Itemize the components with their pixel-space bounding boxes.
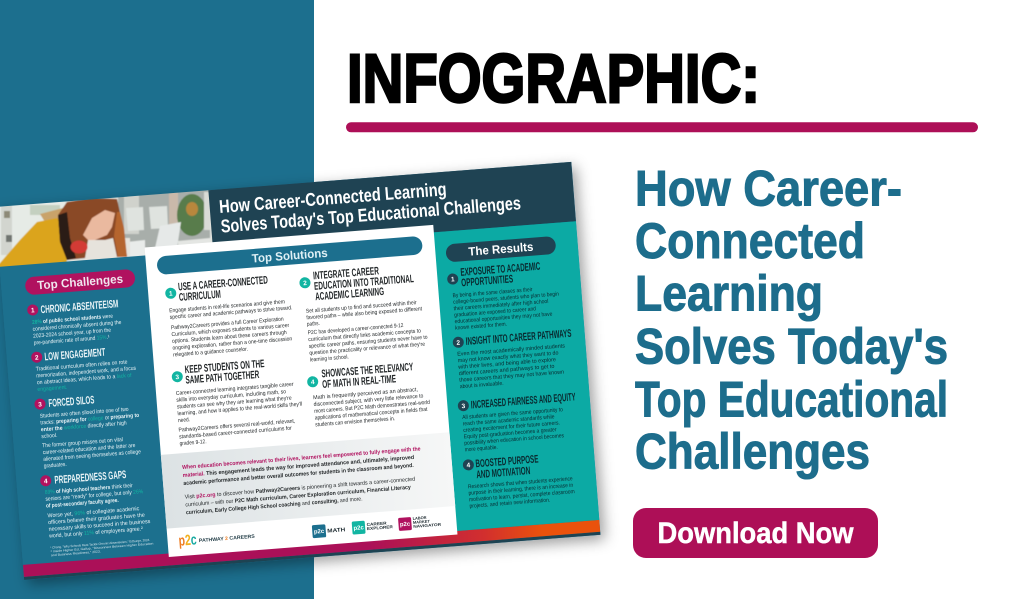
result 1: graduation are exposed to career and	[454, 306, 536, 319]
title: how career-connected learning: Solves Today's	[635, 318, 948, 374]
logo: p2c career explorer: EXPLORER	[367, 524, 393, 531]
solution 1: Pathway2Careers provides a full Career Exploration	[171, 317, 284, 331]
challenge 4: preparedness gaps: necessary skills to succeed in the business	[48, 519, 151, 533]
solution 4: disconnected subject, with very little relevance to	[313, 393, 424, 408]
result 1: By being in the same classes as their	[452, 287, 533, 299]
logo: p2c math	[312, 523, 346, 538]
result 1: known existed for them.	[455, 322, 508, 332]
challenge 3: forced silos: graduates.	[44, 462, 67, 470]
solution 4: Math is frequently perceived as an abstract,	[313, 387, 419, 401]
solution 1: 1	[169, 290, 173, 298]
heading pill: the results	[445, 236, 556, 262]
document title: Solves Today's Top Educational Challenges	[220, 192, 522, 237]
challenge 1: chronic absenteeism: 28% of public school students were	[32, 314, 113, 326]
challenge 3: forced silos: enter the workforce directly after high	[41, 421, 127, 433]
result 3: reach the same academic standards while	[463, 414, 555, 427]
result 1: OPPORTUNITIES	[461, 273, 514, 289]
heading pill: top challenges: Top Challenges	[37, 272, 124, 292]
solution 3: SAME PATH TOGETHER	[185, 369, 260, 387]
challenge 2: low engagement: memorization, independent work, and a focus	[36, 366, 136, 379]
challenge 2: low engagement: engagement.	[37, 385, 68, 393]
logo: p2c career explorer: p2c	[353, 525, 365, 532]
challenge 3: forced silos: tracks: preparing for college or preparing to	[40, 413, 140, 427]
solution 1: USE A CAREER-CONNECTED	[178, 274, 268, 293]
challenge 1: chronic absenteeism	[27, 298, 123, 347]
result 3: more equitable.	[465, 445, 498, 453]
heading pill: the results: The Results	[468, 240, 534, 259]
result 4	[462, 451, 576, 510]
challenge 1: chronic absenteeism: 2023-2024 school year, up from the	[33, 328, 111, 340]
solution 2: INTEGRATE CAREER	[313, 265, 379, 282]
title: how career-connected learning: Connected	[635, 213, 865, 269]
challenge 2: low engagement	[31, 344, 138, 393]
heading pill: top solutions: Top Solutions	[251, 246, 328, 266]
solution 1: relegated to a guidance counselor.	[173, 347, 249, 358]
result 2: with their lives, and being able to explore	[457, 357, 556, 371]
result 1: college-bound peers, students who plan to begin	[453, 292, 559, 306]
challenge 4: preparedness gaps: world, but only 11% of employers agree.²	[48, 526, 143, 540]
result 2: Even the most academically minded students	[457, 343, 565, 358]
solution 1: Engage students in real-life scenarios and give them	[169, 299, 285, 314]
challenge 2: low engagement: Traditional curriculum often relies on rote	[36, 360, 128, 373]
solution 1: specific career and academic pathways to strive toward.	[170, 305, 293, 321]
challenge 3: forced silos: school.	[41, 433, 58, 440]
solution 4: SHOWCASE THE RELEVANCY	[321, 361, 414, 380]
solution 3: 3	[175, 374, 180, 381]
challenge 4: preparedness gaps: of post-secondary faculty agree.	[46, 498, 119, 510]
challenge 4: preparedness gaps: 89% of high school teachers think their	[45, 483, 133, 496]
result 2: 2	[456, 340, 461, 347]
solution 3: KEEP STUDENTS ON THE	[184, 358, 265, 376]
result 3: Equity post-graduation becomes a greater	[464, 427, 557, 440]
solution 2: ACADEMIC LEARNING	[315, 286, 384, 303]
heading pill: top challenges	[25, 269, 136, 295]
challenge 3: forced silos: The former group misses out on vital	[42, 437, 123, 449]
results content	[445, 235, 585, 510]
result 1: educational opportunities they may not have	[454, 312, 553, 325]
logo: p2c labor market navigator: LABOR	[412, 515, 427, 521]
callout: grey text box: material. This engagement leads the way for improved attendance and, ultimately, improved	[183, 455, 415, 479]
challenge 1: chronic absenteeism: considered chronically absent during the	[32, 320, 122, 333]
challenge 3: forced silos: Students are often siloed into one of two	[40, 407, 129, 420]
logo: p2c math: MATH	[327, 527, 346, 535]
result 2: about is invaluable.	[460, 381, 504, 390]
challenge 1: chronic absenteeism: 1	[31, 307, 35, 315]
bottom colour band	[23, 520, 600, 580]
challenge 3: forced silos	[34, 391, 143, 470]
panel: results background	[433, 221, 599, 531]
button: download now	[633, 508, 878, 558]
logo: p2c labor market navigator: p2c	[400, 522, 411, 528]
result 4: purpose in their learning, there is an increase in	[468, 483, 573, 497]
document title	[218, 173, 522, 237]
logo: pathway 2 careers	[178, 527, 256, 550]
challenge 2: low engagement: LOW ENGAGEMENT	[44, 347, 106, 363]
solution 4: most careers. But P2C Math demonstrates real-world	[314, 400, 430, 415]
divider rule	[346, 122, 978, 132]
solution 2	[299, 262, 429, 364]
challenge 4: preparedness gaps: PREPAREDNESS GAPS	[54, 469, 127, 487]
result 3	[457, 391, 580, 454]
title: how career-connected learning: Learning	[635, 266, 823, 322]
solution 3: learning, and how it applies to the real-world skills they'll	[177, 402, 302, 417]
challenge 3: forced silos: alienated from seeing themselves as college	[43, 449, 141, 463]
footnotes: and Business Readiness," 2023.	[51, 549, 101, 557]
logo: p2c labor market navigator	[398, 514, 442, 531]
panel: top solutions	[145, 225, 457, 557]
document title: How Career-Connected Learning	[218, 178, 447, 217]
result 3: creating excitement for their future careers.	[463, 420, 561, 434]
solution 4: applications of mathematical concepts in fields that	[315, 407, 428, 422]
logo: p2c labor market navigator: NAVIGATOR	[413, 522, 442, 529]
title: how career-connected learning: Top Educational	[635, 372, 948, 428]
result 4: BOOSTED PURPOSE	[475, 453, 539, 470]
result 2: INSIGHT INTO CAREER PATHWAYS	[465, 328, 572, 348]
button: download now: Download Now	[658, 517, 854, 550]
result 1: 1	[451, 276, 455, 284]
callout: grey text box: academic performance and better overall outcomes for students in the classroom and beyond.	[183, 463, 414, 487]
heading pill: top solutions	[156, 236, 423, 275]
logo: p2c labor market navigator: MARKET	[413, 519, 431, 525]
footnotes	[50, 538, 154, 557]
solution 2: question the practicality or relevance of what they're	[309, 342, 425, 357]
title: how career-connected learning: How Career-	[635, 160, 902, 216]
callout: grey text box	[182, 446, 424, 516]
blue left background	[0, 0, 314, 599]
challenge 3: forced silos: FORCED SILOS	[48, 394, 95, 410]
solution 2: favored paths – while also being exposed to different	[306, 306, 423, 321]
result 4: motivation to learn, persist, complete classroom	[469, 489, 575, 503]
challenge 4: preparedness gaps: 4	[44, 478, 48, 485]
challenge 4: preparedness gaps: seniors are “ready” for college, but only 26%	[45, 489, 143, 503]
callout: grey text box: curriculum – with our P2C Math curriculum, Career Exploration curriculum, Financial Literacy	[185, 485, 412, 508]
solution 2: curriculum that directly links academic concepts to	[308, 328, 421, 343]
challenge 1: chronic absenteeism: pre-pandemic rate of around 15%.¹	[34, 335, 110, 347]
solutions content	[156, 236, 444, 550]
challenge 3: forced silos: career-related education and the latter are	[43, 443, 136, 456]
result 2: those careers that they may not have known	[459, 370, 564, 384]
infographic document preview	[0, 135, 600, 581]
callout: grey text box: curriculum, Early College High School coaching and consulting, and more.	[186, 496, 363, 516]
result 1: EXPOSURE TO ACADEMIC	[460, 261, 541, 279]
challenge 4: preparedness gaps	[40, 467, 151, 540]
logo: p2c math: p2c	[314, 529, 325, 536]
challenge 2: low engagement: on abstract ideas, which leads to a lack of	[37, 373, 132, 386]
callout: grey text box: Visit p2c.org to discover how Pathway2Careers is pioneering a shift towards a career-connected	[185, 477, 415, 501]
result 1: their careers immediately after high school	[453, 299, 549, 312]
result 2: different careers and pathways to get to	[459, 364, 555, 377]
solution 3: Pathway2Careers offers several real-world, relevant,	[178, 419, 296, 434]
solution 2: EDUCATION INTO TRADITIONAL	[314, 273, 414, 293]
title: how career-connected learning	[635, 160, 948, 480]
photo: student at laptop	[0, 190, 212, 267]
solution 3	[171, 355, 305, 447]
panel: top challenges	[24, 269, 156, 558]
result 4: Research shows that when students experience	[468, 476, 573, 490]
result 2	[452, 328, 575, 390]
solution 2: learning in school.	[310, 354, 349, 364]
solution 2: paths.	[307, 321, 321, 328]
result 4: AND MOTIVATION	[476, 465, 531, 481]
solution 2: 2	[303, 280, 307, 287]
solution 2: specific career paths, ensuring students never have to	[309, 335, 428, 350]
header bar	[208, 162, 576, 250]
result 2: may not know exactly what they want to do	[458, 350, 559, 364]
logo: p2c career explorer: CAREER	[366, 520, 387, 527]
footnotes: ² Inside Higher Ed, Gallup, "Disconnect Between Higher Education	[50, 541, 154, 554]
solution 2: Set all students up to find and succeed within their	[306, 300, 417, 315]
solution 4: 4	[311, 379, 315, 386]
title: how career-connected learning: Challenges	[635, 424, 870, 480]
logo: pathway 2 careers: PATHWAY 2 CAREERS	[199, 534, 256, 544]
result 1	[446, 259, 561, 332]
result 3: INCREASED FAIRNESS AND EQUITY	[470, 391, 576, 411]
result 3: possibility when education in school becomes	[464, 433, 564, 447]
solution 3: standards-based career-connected curriculums for	[179, 426, 292, 440]
solution 1: Curriculum, which exposes students to various career	[171, 323, 290, 338]
challenge 3: forced silos: 3	[38, 401, 43, 409]
logo: pathway 2 careers: p2c	[178, 531, 197, 550]
solution 1	[164, 273, 296, 359]
solution 4: OF MATH IN REAL-TIME	[322, 373, 397, 391]
result 4: projects, and retain new information.	[469, 497, 551, 510]
solution 1: ongoing exploration, rather than a one-time discussion	[172, 336, 292, 352]
challenge 4: preparedness gaps: Worse yet, 96% of collegiate academic	[47, 506, 140, 519]
result 4: 4	[466, 462, 471, 469]
result 3: All students are given the same opportunity to	[462, 407, 563, 421]
solution 1: CURRICULUM	[178, 289, 221, 304]
challenge 4: preparedness gaps: officers believe their graduates have the	[48, 513, 145, 526]
solution 3: Career-connected learning integrates tangible career	[176, 382, 294, 397]
solution 3: grades 9-12.	[179, 439, 207, 447]
solution 1: options. Students learn about these careers through	[172, 330, 287, 345]
callout: grey text box: When education becomes relevant to their lives, learners feel empowered to fully engage with the	[182, 446, 421, 471]
result 3: 3	[461, 403, 466, 410]
solution 4	[306, 360, 431, 429]
footnotes: ¹ Chang, "Why Schools Must Tackle Chronic Absenteeism," EdSurge, 2024.	[50, 538, 150, 550]
solution 3: need.	[178, 417, 191, 424]
challenge 2: low engagement: 2	[35, 354, 39, 362]
document sheet with shadow	[0, 162, 600, 580]
solution 4: students can envision themselves in.	[315, 416, 396, 428]
solution 3: students can see why they are learning what they're	[177, 396, 292, 411]
solution 2: P2C has developed a career-connected 9-12	[308, 323, 404, 336]
logo: p2c career explorer	[352, 518, 393, 535]
solution 3: skills into everyday curriculum, including math, so	[176, 389, 286, 404]
challenge 1: chronic absenteeism: CHRONIC ABSENTEEISM	[40, 298, 119, 316]
heading: INFOGRAPHIC: INFOGRAPHIC:	[347, 40, 760, 117]
